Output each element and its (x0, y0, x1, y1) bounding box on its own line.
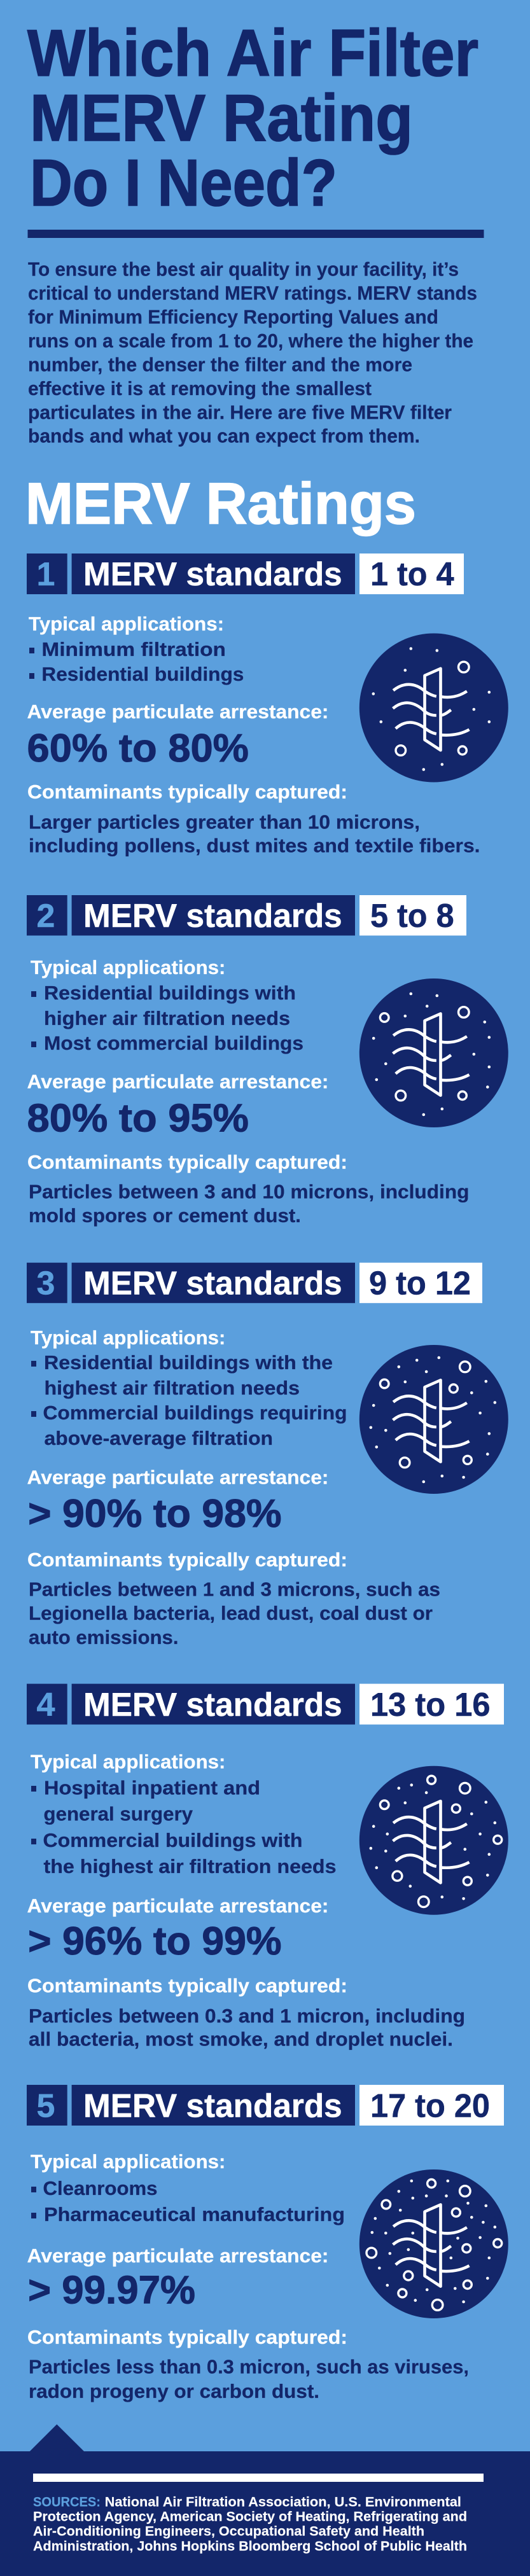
header bar 4 (27, 1684, 504, 1725)
contaminants 2: mold spores or cement dust. (29, 1205, 301, 1227)
typical applications 1 (29, 613, 244, 685)
panel: MERV 17 to 20 (27, 2085, 508, 2402)
header bar 5: MERV standards (83, 2088, 342, 2125)
header bar 1: 1 (37, 556, 55, 593)
contaminants 1: including pollens, dust mites and textile fibers. (29, 835, 480, 856)
typical applications 2: higher air filtration needs (44, 1008, 290, 1029)
typical applications 3: Residential buildings with the (44, 1352, 333, 1374)
intro paragraph: particulates in the air. Here are five MERV filter (28, 402, 452, 424)
section heading: MERV Ratings: MERV Ratings (25, 471, 416, 536)
typical applications 4: Hospital inpatient and (44, 1778, 260, 1799)
contaminants 2: Contaminants typically captured: (27, 1152, 347, 1173)
intro paragraph: bands and what you can expect from them. (28, 425, 420, 447)
arrestance 5 (27, 2245, 328, 2312)
title: Do I Need? (30, 146, 337, 220)
arrestance 4: Average particulate arrestance: (27, 1895, 328, 1917)
typical applications 4: general surgery (43, 1803, 193, 1825)
title (27, 17, 478, 220)
icon: filter with densest particles (359, 2169, 508, 2318)
title rule (28, 230, 484, 238)
sources text: SOURCES: (33, 2495, 101, 2510)
typical applications 1: Typical applications: (29, 613, 224, 635)
typical applications 4: Typical applications: (31, 1751, 225, 1772)
typical applications 4 (31, 1751, 336, 1877)
intro paragraph: effective it is at removing the smallest (28, 378, 372, 400)
typical applications 2: Most commercial buildings (44, 1033, 303, 1054)
typical applications 1: Residential buildings (41, 664, 244, 685)
icon: filter with many particles (359, 1345, 508, 1494)
header bar 2: 2 (37, 898, 55, 935)
typical applications 3: above-average filtration (45, 1428, 273, 1449)
header bar 3: 3 (37, 1265, 55, 1302)
icon: filter with few particles (359, 634, 508, 783)
contaminants 4 (27, 1975, 465, 2050)
intro paragraph: runs on a scale from 1 to 20, where the higher the (28, 330, 473, 352)
header bar 5 (27, 2085, 504, 2126)
typical applications 3 (31, 1327, 347, 1449)
contaminants 3: auto emissions. (29, 1627, 178, 1648)
contaminants 3: Legionella bacteria, lead dust, coal dust or (29, 1603, 433, 1624)
panel: MERV 13 to 16 (27, 1684, 508, 2050)
arrestance 2: 80% to 95% (27, 1097, 249, 1141)
typical applications 5: Typical applications: (31, 2151, 225, 2173)
arrestance 5: > 99.97% (28, 2269, 195, 2312)
sources text (33, 2495, 467, 2554)
arrestance 1: 60% to 80% (27, 727, 249, 770)
intro paragraph: critical to understand MERV ratings. MERV stands (28, 282, 477, 304)
header bar 2: 5 to 8 (370, 898, 454, 935)
contaminants 4: all bacteria, most smoke, and droplet nuclei. (29, 2029, 453, 2050)
contaminants 5: radon progeny or carbon dust. (29, 2381, 319, 2402)
typical applications 5: Cleanrooms (43, 2178, 158, 2199)
panel: MERV 9 to 12 (27, 1263, 508, 1648)
contaminants 5: Contaminants typically captured: (27, 2327, 347, 2348)
typical applications 5 (31, 2151, 345, 2225)
typical applications 2: Typical applications: (31, 957, 225, 978)
header bar 3 (27, 1263, 482, 1303)
header bar 2 (27, 895, 466, 935)
typical applications 2 (31, 957, 303, 1054)
header bar 3: 9 to 12 (369, 1265, 471, 1302)
contaminants 3: Contaminants typically captured: (27, 1549, 347, 1571)
title: Which Air Filter (27, 17, 478, 90)
header bar 4: 4 (37, 1687, 55, 1723)
intro paragraph: number, the denser the filter and the more (28, 354, 412, 376)
panel: MERV 5 to 8 (27, 895, 508, 1227)
typical applications 5: Pharmaceutical manufacturing (44, 2204, 345, 2225)
arrestance 2: Average particulate arrestance: (27, 1071, 328, 1093)
typical applications 3: Typical applications: (31, 1327, 225, 1349)
contaminants 5 (27, 2327, 469, 2402)
header bar 1: 1 to 4 (370, 556, 454, 593)
header bar 5: 17 to 20 (370, 2088, 490, 2125)
contaminants 1: Contaminants typically captured: (27, 781, 347, 803)
footer: sources (0, 2425, 530, 2576)
typical applications 2: Residential buildings with (44, 982, 296, 1004)
typical applications 3: highest air filtration needs (45, 1377, 300, 1399)
contaminants 3 (27, 1549, 440, 1648)
arrestance 3 (27, 1467, 328, 1536)
arrestance 2 (27, 1071, 328, 1141)
intro paragraph: for Minimum Efficiency Reporting Values and (28, 307, 438, 328)
contaminants 3: Particles between 1 and 3 microns, such as (29, 1578, 440, 1600)
title: MERV Rating (30, 81, 413, 155)
header bar 4: MERV standards (83, 1687, 342, 1723)
icon: filter with dense particles (359, 1766, 508, 1915)
arrestance 3: Average particulate arrestance: (27, 1467, 328, 1489)
contaminants 1: Larger particles greater than 10 microns, (29, 812, 420, 833)
arrestance 1: Average particulate arrestance: (27, 701, 328, 723)
typical applications 4: the highest air filtration needs (43, 1856, 336, 1877)
sources text: Protection Agency, American Society of Heating, Refrigerating and (33, 2510, 467, 2524)
panel: MERV 1 to 4 (27, 553, 508, 856)
header bar 2: MERV standards (83, 898, 342, 935)
contaminants 4: Contaminants typically captured: (27, 1975, 347, 1997)
header bar 5: 5 (37, 2088, 55, 2125)
arrestance 3: > 90% to 98% (28, 1492, 282, 1536)
contaminants 1 (27, 781, 480, 856)
header bar 4: 13 to 16 (370, 1687, 490, 1723)
typical applications 4: Commercial buildings with (43, 1830, 303, 1851)
typical applications 3: Commercial buildings requiring (43, 1402, 347, 1424)
contaminants 4: Particles between 0.3 and 1 micron, including (29, 2005, 465, 2027)
contaminants 5: Particles less than 0.3 micron, such as viruses, (29, 2357, 469, 2378)
sources text: National Air Filtration Association, U.S. Environmental (105, 2495, 461, 2510)
intro paragraph (28, 259, 477, 447)
contaminants 2 (27, 1152, 470, 1227)
arrestance 5: Average particulate arrestance: (27, 2245, 328, 2267)
header bar 1 (27, 553, 464, 594)
arrestance 4 (27, 1895, 328, 1963)
arrestance 4: > 96% to 99% (28, 1919, 282, 1963)
contaminants 2: Particles between 3 and 10 microns, including (29, 1181, 470, 1202)
arrestance 1 (27, 701, 328, 770)
typical applications 1: Minimum filtration (41, 639, 226, 660)
icon: filter with more particles (359, 978, 508, 1127)
header bar 3: MERV standards (83, 1265, 342, 1302)
header bar 1: MERV standards (83, 556, 342, 593)
sources text: Air-Conditioning Engineers, Occupational Safety and Health (33, 2524, 424, 2539)
intro paragraph: To ensure the best air quality in your facility, it’s (28, 259, 459, 281)
sources text: Administration, Johns Hopkins Bloomberg School of Public Health (33, 2539, 467, 2554)
